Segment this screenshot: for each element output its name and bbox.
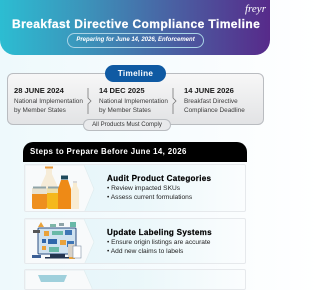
date 2: by Member States [99,107,151,114]
subtitle pill [67,33,204,48]
step card: update labeling systems [24,218,246,264]
step card: partial third [24,269,246,290]
date 2: National Implementation [99,98,168,105]
timeline panel [7,73,264,125]
image panel [26,165,94,211]
date 3: Compliance Deadline [184,107,245,114]
card bullets [107,238,210,254]
steps heading bar: Steps to Prepare Before June 14, 2026 [30,147,187,156]
timeline heading pill: Timeline [118,69,153,78]
image panel [26,270,92,289]
date 1: by Member States [14,107,66,114]
card bullets: • Add new claims to labels [107,248,183,254]
icon: bottles [32,166,79,209]
header banner [0,0,270,55]
icon: labeling dashboard [32,222,82,259]
arrow 2 [172,88,176,114]
timeline heading pill [105,65,166,82]
date 1: 28 JUNE 2024 [14,86,64,95]
card bullets: • Assess current formulations [107,194,192,201]
date 1: National Implementation [14,98,83,105]
card heading: Update Labeling Systems [107,228,212,237]
image panel [26,219,94,263]
all products pill: All Products Must Comply [92,121,162,128]
card bullets [107,185,192,201]
step card: audit product categories [24,164,246,212]
date 3 [184,86,245,114]
steps heading bar [23,142,247,162]
date 3: 14 JUNE 2026 [184,86,234,95]
date 1 [14,86,83,114]
card bullets: • Ensure origin listings are accurate [107,238,210,246]
card heading: Audit Product Categories [107,174,211,183]
date 2: 14 DEC 2025 [99,86,145,95]
title: Breakfast Directive Compliance Timeline [12,17,260,31]
arrow 1 [88,88,92,114]
card bullets: • Review impacted SKUs [107,185,180,192]
date 3: Breakfast Directive [184,98,238,105]
logo: freyr [245,3,266,15]
subtitle pill: Preparing for June 14, 2026, Enforcement [76,37,195,43]
all products pill [83,119,171,131]
date 2 [99,86,168,114]
